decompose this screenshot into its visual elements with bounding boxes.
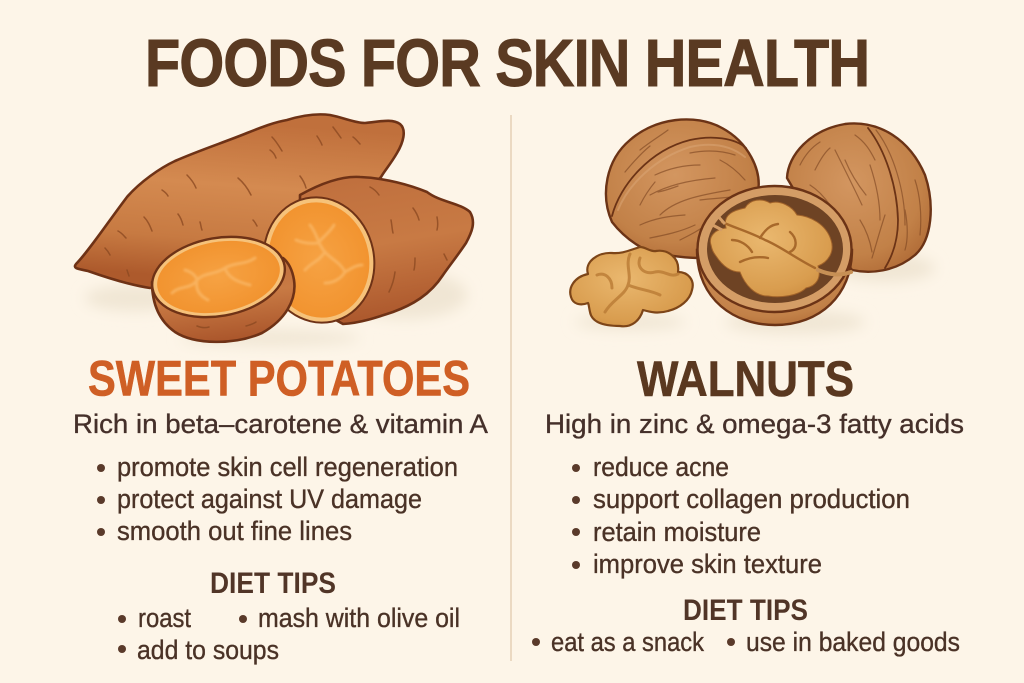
illustration: walnuts (570, 119, 935, 334)
cut face of potato (251, 186, 387, 334)
kernel lobes in shell (707, 200, 851, 297)
diet tips list: eat as a snack (551, 627, 704, 657)
illustration: sweet potatoes (75, 114, 473, 346)
diet tips list: use in baked goods (746, 627, 960, 657)
title: FOODS FOR SKIN HEALTH (145, 26, 870, 101)
front potato (300, 177, 473, 324)
diet tips list: add to soups (137, 635, 279, 665)
diet tips heading: DIET TIPS (210, 567, 336, 600)
benefits list: improve skin texture (593, 549, 822, 579)
diet tips list: roast (138, 603, 191, 633)
subheading: nutrients: Rich in beta–carotene & vitamin A (73, 409, 488, 439)
benefits list: support collagen production (593, 484, 910, 514)
round slice (146, 227, 294, 342)
halved walnut (697, 186, 852, 325)
left whole walnut (606, 119, 759, 258)
benefits list: promote skin cell regeneration (117, 452, 458, 482)
heading: walnuts: WALNUTS (637, 351, 854, 407)
diet tips heading: DIET TIPS (683, 594, 808, 627)
benefits list (97, 452, 458, 546)
panel: sweet potatoes (73, 114, 488, 665)
benefits list: reduce acne (593, 452, 729, 482)
loose walnut kernel (570, 247, 693, 326)
panel: walnuts (532, 119, 964, 657)
benefits list (572, 452, 910, 579)
benefits list: smooth out fine lines (117, 516, 352, 546)
right whole walnut (787, 123, 931, 272)
diet tips list (118, 603, 460, 665)
subheading: nutrients: High in zinc & omega-3 fatty acids (545, 409, 964, 439)
back potato (75, 114, 404, 288)
ground shadows (575, 254, 935, 334)
benefits list: protect against UV damage (117, 484, 422, 514)
diet tips list: mash with olive oil (258, 603, 460, 633)
diet tips list (532, 627, 960, 657)
benefits list: retain moisture (593, 517, 761, 547)
ground shadows (85, 271, 467, 346)
center divider (510, 115, 512, 661)
heading: sweet potatoes: SWEET POTATOES (88, 350, 470, 406)
